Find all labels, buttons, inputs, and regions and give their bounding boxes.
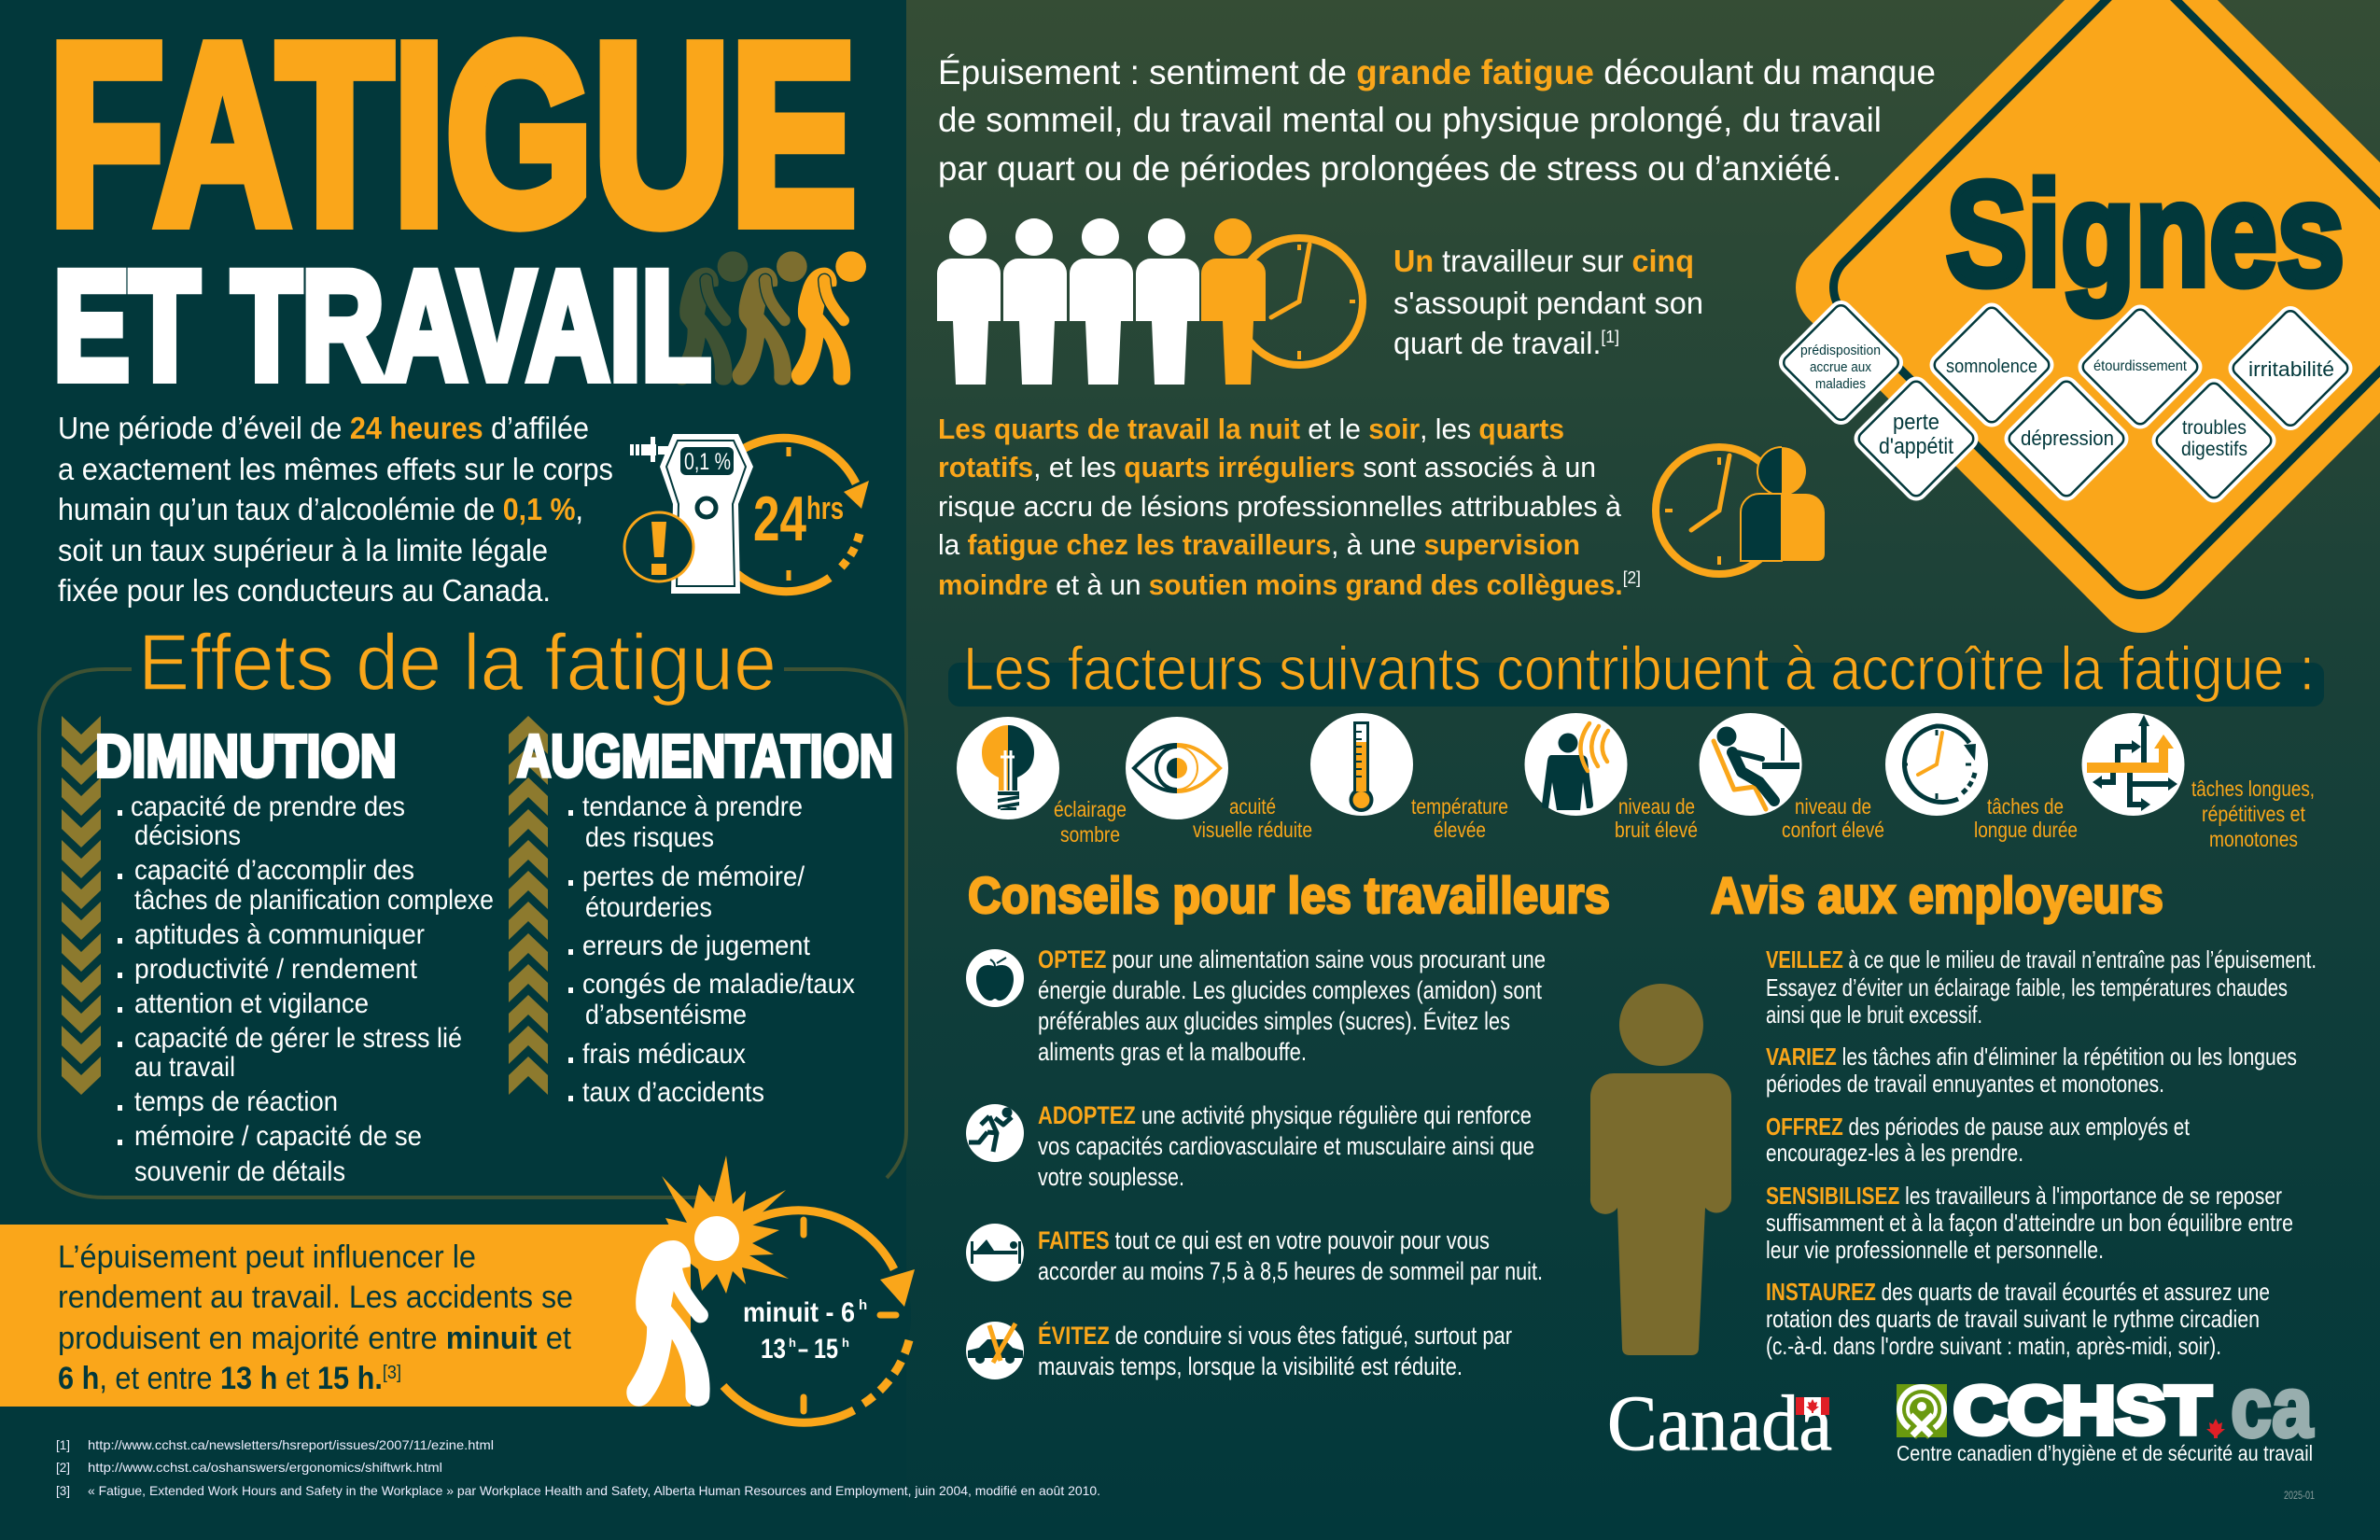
text: faites (1038, 1226, 1543, 1285)
text block: definition of exhaustion: par quart ou de périodes prolongées de stress ou d’anxiété. (938, 149, 1841, 188)
icon: comfort chair (1700, 713, 1802, 816)
text: sensibilisez (1766, 1182, 2293, 1264)
text: accident hours: h (789, 1336, 796, 1350)
text block: 24 heures: fixée pour les conducteurs au Canada. (58, 573, 551, 608)
text: adoptez (1038, 1101, 1534, 1191)
diamond: somnolence (1941, 315, 2042, 414)
icon: four white people (937, 218, 1199, 385)
list: diminution: attention et vigilance (134, 988, 369, 1019)
footnotes: [1] (56, 1437, 70, 1452)
text: instaurez: INSTAUREZ des quarts de travail écourtés et assurez une (1766, 1278, 2270, 1306)
label: bruit élevé (1615, 794, 1698, 842)
text: accident hours: 13 (761, 1334, 786, 1365)
diamond: perte d'appétit: d'appétit (1879, 434, 1953, 459)
heading: effets de la fatigue: Effets de la fatigue (138, 619, 777, 707)
label: température élevée: élevée (1434, 818, 1486, 842)
text: accident hours: 15 (814, 1334, 838, 1365)
text: accident hours (743, 1297, 867, 1365)
text block: definition of exhaustion: Épuisement : sentiment de grande fatigue découlant du manque (938, 53, 1936, 91)
logo: maple leaf (2206, 1419, 2225, 1438)
text block: shift work risks: Les quarts de travail la nuit et le soir, les quarts (938, 413, 1564, 445)
text: instaurez: rotation des quarts de travail suivant le rythme circadien (1766, 1305, 2260, 1333)
label: tâches longues répétitives: monotones (2209, 827, 2298, 851)
heading: augmentation: AUGMENTATION (517, 722, 893, 790)
list: augmentation: pertes de mémoire/ (582, 861, 805, 892)
text block: one in five workers: Un travailleur sur cinq (1393, 244, 1694, 278)
figure 2 (733, 251, 807, 385)
panel: signs diamond (1841, 0, 2380, 588)
text: évitez: ÉVITEZ de conduire si vous êtes fatigué, surtout par (1038, 1321, 1512, 1350)
text block: 24 heures: soit un taux supérieur à la limite légale (58, 533, 548, 567)
list: diminution: mémoire / capacité de se (134, 1121, 422, 1152)
list: augmentation: erreurs de jugement (582, 931, 811, 961)
footnotes: http://www.cchst.ca/newsletters/hsreport/issues/2007/11/ezine.html (88, 1437, 494, 1452)
label: tâches de longue durée (1974, 794, 2078, 842)
text: optez (1038, 945, 1546, 1066)
text: offrez: OFFREZ des périodes de pause aux employés et (1766, 1113, 2191, 1141)
list: diminution: tâches de planification complexe (134, 885, 494, 916)
text: optez: aliments gras et la malbouffe. (1038, 1038, 1307, 1066)
label: confort élevé: confort élevé (1782, 818, 1884, 842)
list: augmentation: taux d’accidents (582, 1077, 764, 1108)
figure 3 (791, 251, 866, 385)
icon: clock behind fifth person (1236, 238, 1363, 365)
label: température élevée (1411, 794, 1508, 842)
text block: shift work risks: [2] (1623, 568, 1641, 587)
text: adoptez: vos capacités cardiovasculaire et musculaire ainsi que (1038, 1132, 1534, 1160)
icon: 24 hrs label: hrs (806, 491, 844, 526)
text block: definition of exhaustion: de sommeil, du travail mental ou physique prolongé, du travail (938, 101, 1882, 139)
text block: shift work risks: rotatifs, et les quarts irréguliers sont associés à un (938, 451, 1596, 483)
text block: accident banner: 6 h, et entre 13 h et 15 h. (58, 1361, 389, 1396)
icon: car crossed out (966, 1322, 1024, 1379)
diamond: irritabilité: irritabilité (2248, 357, 2334, 381)
text: veillez (1766, 945, 2317, 1029)
text: veillez: ainsi que le bruit excessif. (1766, 1001, 1982, 1029)
text block: 24 heures: Une période d’éveil de 24 heures d’affilée (58, 411, 589, 445)
heading: diminution: DIMINUTION (95, 722, 397, 790)
icon: down chevrons (62, 716, 101, 1095)
person 4 (1136, 218, 1199, 385)
list: augmentation: frais médicaux (582, 1039, 746, 1070)
label: acuité visuelle réduite: acuité (1229, 794, 1276, 819)
list: augmentation: étourderies (585, 892, 712, 923)
text: optez: énergie durable. Les glucides complexes (amidon) sont (1038, 976, 1542, 1004)
list: diminution: souvenir de détails (134, 1156, 345, 1187)
text block: shift work risks: moindre et à un soutien moins grand des collègues. (938, 568, 1641, 601)
icon: breathalyzer: 0,1 % (684, 449, 731, 475)
label: acuité visuelle réduite (1193, 794, 1312, 842)
label: éclairage sombre: sombre (1060, 822, 1120, 847)
footnotes: « Fatigue, Extended Work Hours and Safety in the Workplace » par Workplace Health and Safety, Alberta Human Resources and Employment, juin 2004, modifié en août 2010. (88, 1483, 1100, 1498)
list: diminution: capacité d’accomplir des (134, 855, 414, 886)
text block: shift work risks: risque accru de lésions professionnelles attribuables à (938, 490, 1622, 523)
heading: conseils pour les travailleurs: Conseils pour les travailleurs (968, 866, 1610, 924)
label: acuité visuelle réduite: visuelle réduite (1193, 818, 1312, 842)
text: adoptez: votre souplesse. (1038, 1163, 1184, 1191)
diamond: prédisposition: prédisposition (1800, 343, 1881, 358)
text: organization name: Centre canadien d’hygiène et de sécurité au travail (1897, 1441, 2313, 1465)
text block: accident banner: produisent en majorité entre minuit et (58, 1321, 572, 1356)
text block: accident banner: [3] (383, 1363, 401, 1383)
text block: 24 heures: humain qu’un taux d’alcoolémie de 0,1 %, (58, 492, 583, 526)
diamond: irritabilité (2240, 318, 2341, 418)
list: diminution: décisions (134, 820, 241, 851)
text: optez: préférables aux glucides simples (sucres). Évitez les (1038, 1007, 1510, 1035)
logo: .ca: ca (2231, 1360, 2314, 1455)
text: optez: OPTEZ pour une alimentation saine vous procurant une (1038, 945, 1546, 973)
label: tâches longues répétitives (2191, 777, 2315, 851)
icon: thermometer (1310, 713, 1413, 816)
diamond: prédisposition (1791, 313, 1891, 413)
icon: 24 hour clock (737, 438, 869, 592)
logo: CCHST emblem (1897, 1384, 1947, 1437)
list: augmentation: d’absentéisme (585, 1000, 747, 1030)
text block: shift work risks (938, 413, 1641, 601)
diamond: troubles digestifs: digestifs (2181, 439, 2247, 460)
icon: apple (966, 949, 1024, 1007)
list: diminution: capacité de gérer le stress lié (134, 1023, 462, 1054)
footnotes: http://www.cchst.ca/oshanswers/ergonomics/shiftwrk.html (88, 1460, 442, 1475)
diamond: dépression: dépression (2021, 427, 2114, 450)
icon: bed (966, 1224, 1024, 1281)
text: instaurez: (c.-à-d. dans l'ordre suivant : matin, après-midi, soir). (1766, 1332, 2221, 1360)
diamond: somnolence: somnolence (1946, 357, 2037, 377)
icon: eye (1126, 717, 1228, 819)
list: augmentation (568, 791, 855, 1108)
diamond: troubles digestifs (2163, 390, 2264, 491)
text block: shift work risks: la fatigue chez les travailleurs, à une supervision (938, 528, 1580, 561)
text: évitez: mauvais temps, lorsque la visibilité est réduite. (1038, 1352, 1463, 1380)
text: accident hours: h (859, 1297, 867, 1313)
list: augmentation: tendance à prendre (582, 791, 803, 822)
text: variez: périodes de travail ennuyantes et monotones. (1766, 1070, 2164, 1098)
label: éclairage sombre: éclairage (1054, 797, 1127, 821)
label: bruit élevé: bruit élevé (1615, 818, 1698, 842)
text block: one in five workers (1393, 244, 1703, 360)
diamond: prédisposition: maladies (1815, 376, 1866, 392)
icon: up chevrons (509, 716, 548, 1095)
panel: accident banner (0, 1225, 691, 1407)
text: accident hours: – (798, 1334, 808, 1365)
label: tâches longues répétitives: répétitives et (2202, 802, 2306, 826)
text: offrez: encouragez-les à les prendre. (1766, 1139, 2023, 1167)
panel: effects frame (39, 669, 906, 1197)
logo: CCHST wordmark: CCHST (1953, 1374, 2211, 1449)
panel: factors title bar (948, 663, 2324, 707)
text: évitez (1038, 1321, 1512, 1380)
footnotes: [2] (56, 1460, 70, 1475)
diamond: dépression (2016, 388, 2117, 489)
diamond: troubles digestifs: troubles (2182, 417, 2247, 439)
icon: three tired walking figures (673, 251, 866, 385)
diamond: perte d'appétit (1867, 388, 1966, 489)
text: adoptez: ADOPTEZ une activité physique régulière qui renforce (1038, 1101, 1532, 1129)
text: offrez (1766, 1113, 2191, 1167)
text block: definition of exhaustion (938, 53, 1936, 188)
text: instaurez (1766, 1278, 2270, 1360)
list: augmentation: des risques (585, 822, 714, 853)
list: diminution: capacité de prendre des (131, 791, 405, 822)
icon: orange person (1201, 218, 1266, 385)
text: sensibilisez: leur vie professionnelle et personnelle. (1766, 1236, 2104, 1264)
label: tâches de longue durée: longue durée (1974, 818, 2078, 842)
person 1 (937, 218, 1001, 385)
icon: warning circle (624, 512, 693, 581)
icon: white tired figure (626, 1240, 710, 1407)
text block: accident banner (58, 1239, 573, 1396)
list: diminution: temps de réaction (134, 1086, 338, 1117)
label: température élevée: température (1411, 794, 1508, 819)
label: bruit élevé: niveau de (1618, 794, 1695, 819)
text: faites: FAITES tout ce qui est en votre pouvoir pour vous (1038, 1226, 1490, 1254)
text: accident hours: minuit - 6 (743, 1297, 855, 1328)
icon: light bulb (957, 717, 1059, 819)
icon: accident clock (696, 1208, 915, 1422)
diamond: étourdissement (2091, 317, 2190, 416)
person 3 (1070, 218, 1133, 385)
icon: clock with half person (1656, 447, 1825, 574)
label: confort élevé (1782, 794, 1884, 842)
diamond: prédisposition: accrue aux (1810, 359, 1871, 375)
figure 1 (673, 251, 748, 385)
icon: 24 hrs label: 24 (753, 483, 806, 554)
text block: one in five workers: quart de travail. (1393, 326, 1605, 360)
list: diminution: aptitudes à communiquer (134, 919, 425, 950)
label: tâches longues répétitives: tâches longues, (2191, 777, 2315, 801)
text block: 24 heures (58, 411, 613, 608)
label: tâches de longue durée: tâches de (1987, 794, 2064, 819)
icon: sunburst (662, 1155, 789, 1294)
heading: avis aux employeurs: Avis aux employeurs (1711, 866, 2163, 924)
icon: repetitive task arrows (2081, 713, 2184, 816)
footnotes: [3] (56, 1483, 70, 1498)
footnotes (56, 1437, 1100, 1498)
list: diminution: productivité / rendement (134, 954, 418, 985)
icon: noise (1525, 713, 1628, 816)
list: diminution: au travail (134, 1052, 235, 1083)
diamond: perte d'appétit: perte (1893, 410, 1939, 435)
icon: olive person (1590, 984, 1731, 1355)
logo: Canada wordmark: Canada (1607, 1379, 1832, 1467)
text block: 24 heures: a exactement les mêmes effets sur le corps (58, 452, 613, 486)
icon: long task clock (1885, 713, 1988, 816)
text: accident hours: h (842, 1336, 849, 1350)
text: faites: accorder au moins 7,5 à 8,5 heures de sommeil par nuit. (1038, 1257, 1543, 1285)
text block: one in five workers: [1] (1601, 328, 1619, 346)
text: edition date: 2025-01 (2284, 1489, 2315, 1502)
diamond: étourdissement: étourdissement (2093, 358, 2188, 374)
label: confort élevé: niveau de (1795, 794, 1871, 819)
icon: breathalyzer (630, 434, 753, 594)
list: diminution (118, 791, 494, 1187)
label: éclairage sombre (1054, 797, 1127, 847)
text block: accident banner: rendement au travail. Les accidents se (58, 1280, 573, 1315)
text: sensibilisez: SENSIBILISEZ les travailleurs à l'importance de se reposer (1766, 1182, 2282, 1210)
text: variez (1766, 1043, 2297, 1098)
title: ET TRAVAIL: ET TRAVAIL (53, 240, 711, 413)
list: augmentation: congés de maladie/taux (582, 969, 855, 1000)
icon: runner (966, 1104, 1024, 1162)
person 2 (1003, 218, 1067, 385)
text block: one in five workers: s'assoupit pendant son (1393, 286, 1703, 320)
text block: accident banner: L’épuisement peut influencer le (58, 1239, 476, 1275)
